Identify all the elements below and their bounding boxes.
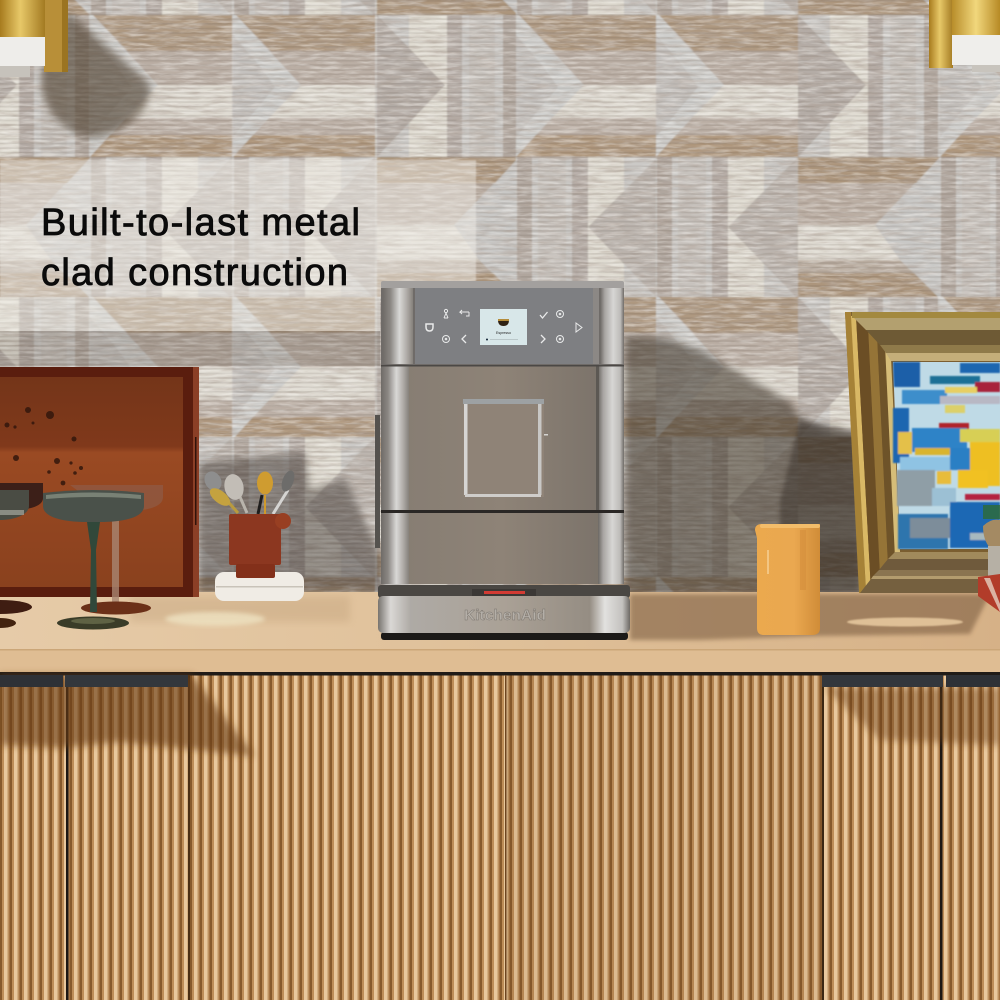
spoon cup on marble coaster xyxy=(201,468,304,601)
heading xyxy=(41,202,360,294)
glass: left rear coupe xyxy=(0,483,43,614)
framed painting xyxy=(845,312,1000,593)
painting canvas xyxy=(893,362,1000,549)
spoons xyxy=(201,468,297,514)
drip tray base xyxy=(378,585,630,640)
terracotta cup xyxy=(229,513,291,578)
plant pot and books xyxy=(978,505,1000,612)
brand wordmark: KitchenAid xyxy=(464,608,546,624)
cabinet with fluted doors xyxy=(0,672,1000,1000)
orange pitcher xyxy=(755,524,820,635)
water tank window xyxy=(463,399,548,497)
wooden tray xyxy=(0,367,199,597)
side handle xyxy=(375,415,380,548)
lower body xyxy=(381,513,624,584)
panel icons xyxy=(426,309,582,343)
marble coaster xyxy=(215,572,304,601)
gold frame xyxy=(845,312,1000,593)
glass: left front coupe xyxy=(0,490,29,628)
middle body xyxy=(381,365,624,511)
cabinet handles xyxy=(0,675,1000,687)
glass: rear amber coupe xyxy=(70,485,163,614)
shadows on the wall xyxy=(0,12,862,595)
heading: Built-to-last metal xyxy=(41,202,360,244)
display screen xyxy=(480,309,527,345)
control panel xyxy=(415,288,593,364)
top cap xyxy=(381,281,624,289)
glass: front green coupe xyxy=(43,490,144,630)
coupe glasses xyxy=(0,483,163,630)
coffee machine xyxy=(375,281,630,640)
left wall lamp xyxy=(0,0,68,77)
seam xyxy=(381,510,624,513)
burl spots xyxy=(4,407,83,485)
wallpaper background xyxy=(0,0,1000,719)
upper section xyxy=(381,288,624,365)
countertop xyxy=(0,592,1000,674)
display screen: Espresso xyxy=(496,331,511,335)
right wall lamp xyxy=(929,0,1000,72)
heading: clad construction xyxy=(41,252,348,294)
